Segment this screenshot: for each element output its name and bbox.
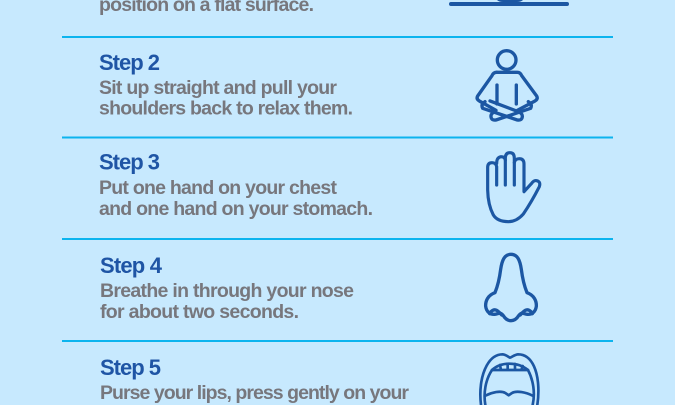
step 4 heading: Step 4 <box>100 253 163 278</box>
step 3 text: and one hand on your stomach. <box>99 198 373 220</box>
icon: hand <box>488 153 540 222</box>
icon: meditating person <box>477 51 537 120</box>
step 5 heading: Step 5 <box>100 355 161 380</box>
step 4 text: Breathe in through your nose <box>100 280 354 302</box>
step 2 text <box>99 77 353 120</box>
step 2 <box>99 50 353 120</box>
step 5 <box>100 355 409 405</box>
step 2 text: shoulders back to relax them. <box>99 98 353 120</box>
step 4 text <box>100 280 354 323</box>
step 3 text: Put one hand on your chest <box>99 177 338 199</box>
icon: surface with figure <box>449 0 569 6</box>
step 2 heading: Step 2 <box>99 50 160 75</box>
step 2 text: Sit up straight and pull your <box>99 77 337 99</box>
step 4 text: for about two seconds. <box>100 301 299 323</box>
step 3 <box>99 150 373 220</box>
step 3 text <box>99 177 373 220</box>
icon: open mouth <box>480 354 538 405</box>
step 5 text: Purse your lips, press gently on your <box>100 382 409 404</box>
step 3 heading: Step 3 <box>99 150 160 174</box>
icon: nose <box>486 254 536 321</box>
step 4 <box>100 253 354 323</box>
